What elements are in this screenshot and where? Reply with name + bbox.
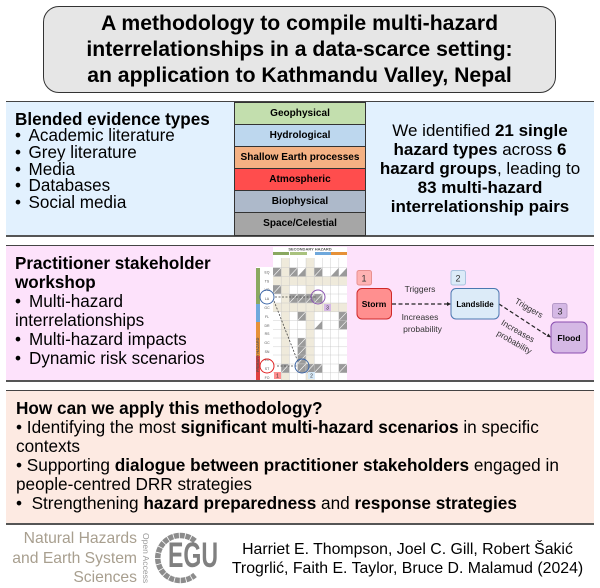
group: geophysical: Geophysical — [270, 108, 330, 119]
text: blended evidence types: Blended evidence types — [15, 110, 210, 128]
panel: workshop — [6, 245, 594, 382]
matrix: GC — [264, 341, 270, 345]
text: practitioner workshop: • Multi-hazard impacts — [15, 330, 187, 349]
title — [43, 6, 556, 93]
box 1 — [357, 270, 372, 285]
landslide — [451, 288, 499, 319]
group: atmospheric — [234, 168, 366, 191]
text: blended evidence types: • Social media — [15, 193, 126, 212]
matrix: VO — [264, 288, 270, 292]
text: blended evidence types: • Grey literature — [15, 143, 137, 162]
open access label: Open Access — [141, 533, 151, 583]
group: space — [234, 212, 366, 236]
authors: Trogrlić, Faith E. Taylor, Bruce D. Malamud (2024) — [232, 560, 583, 577]
text: blended evidence types: • Media — [15, 160, 75, 179]
label triggers 2: Triggers — [513, 296, 545, 320]
arrow: landslide to flood — [499, 304, 551, 338]
title: an application to Kathmandu Valley, Nepal — [87, 64, 512, 86]
journal name: and Earth System — [12, 550, 137, 566]
box 3 — [552, 304, 567, 318]
group: space: Space/Celestial — [263, 218, 337, 229]
flow diagram: storm landslide flood — [356, 270, 588, 356]
matrix: DR — [264, 324, 270, 328]
box 2 — [451, 270, 466, 285]
panel: blended evidence — [6, 101, 594, 237]
matrix: SECONDARY HAZARD — [288, 246, 332, 252]
box 2: 2 — [455, 274, 461, 284]
matrix: TS — [265, 280, 270, 284]
panel: application — [6, 390, 594, 525]
matrix — [256, 246, 347, 380]
text: summary: hazard types across 6 — [394, 140, 566, 158]
matrix: FL — [265, 315, 269, 319]
label triggers 1: Triggers — [405, 284, 435, 294]
matrix: 3 — [326, 306, 329, 312]
label increases probability 2: Increases — [500, 317, 536, 344]
text: practitioner workshop — [15, 254, 211, 368]
matrix: GC — [264, 306, 270, 310]
journal name: Natural Hazards — [24, 530, 137, 547]
text: blended evidence types — [15, 110, 210, 212]
matrix: ST — [265, 367, 270, 371]
matrix: EC — [265, 358, 270, 362]
text: blended evidence types: • Academic literature — [15, 126, 175, 145]
storm: Storm — [362, 299, 387, 309]
text: how can we apply — [16, 398, 559, 512]
text: summary — [380, 120, 580, 216]
group: biophysical: Biophysical — [272, 196, 328, 207]
text: summary: We identified 21 single — [392, 120, 568, 140]
text: how can we apply: • Identifying the most significant multi-hazard scenarios in specific — [16, 416, 539, 436]
group: shallow earth: Shallow Earth processes — [241, 152, 359, 163]
flood: Flood — [557, 333, 581, 343]
text: how can we apply: How can we apply this methodology? — [16, 398, 323, 418]
flood — [551, 322, 587, 353]
journal name — [12, 530, 137, 586]
label increases probability 1: probability — [403, 324, 443, 334]
text: practitioner workshop: • Multi-hazard — [15, 292, 123, 311]
arrow: storm to landslide — [392, 302, 451, 306]
label increases probability 2: probability — [495, 328, 534, 356]
journal name: Sciences — [73, 569, 137, 586]
matrix: EQ — [264, 270, 270, 274]
text: practitioner workshop: Practitioner stakeholder — [15, 254, 211, 272]
logo: EGU — [155, 532, 218, 584]
group: geophysical — [234, 102, 366, 125]
box 3: 3 — [557, 306, 563, 316]
text: how can we apply: people-centred DRR strategies — [16, 474, 252, 494]
storm — [357, 288, 392, 319]
matrix: FO — [265, 376, 270, 380]
matrix: 1 — [276, 374, 279, 380]
text: how can we apply: contexts — [16, 436, 80, 456]
group: hydrological: Hydrological — [270, 130, 330, 141]
matrix: LA — [265, 297, 270, 301]
text: practitioner workshop: workshop — [15, 273, 96, 292]
matrix: SN — [265, 350, 270, 354]
hazard groups stack — [234, 102, 366, 236]
text: practitioner workshop: interrelationships — [15, 311, 144, 330]
landslide: Landslide — [456, 300, 494, 309]
box 1: 1 — [361, 274, 367, 284]
text: blended evidence types: • Databases — [15, 176, 110, 195]
matrix: RS — [265, 332, 270, 336]
group: hydrological — [234, 124, 366, 147]
matrix: 2 — [310, 374, 313, 380]
text: practitioner workshop: • Dynamic risk scenarios — [15, 349, 205, 368]
text: summary: interrelationship pairs — [391, 196, 569, 216]
title: interrelationships in a data-scarce setting: — [86, 38, 513, 60]
text: how can we apply: • Strengthening hazard preparedness and response strategies — [16, 492, 517, 512]
group: biophysical — [234, 190, 366, 213]
text: summary: hazard groups, leading to — [380, 158, 580, 178]
group: shallow earth — [234, 146, 366, 169]
text: summary: 83 multi-hazard — [418, 178, 542, 196]
text: how can we apply: • Supporting dialogue between practitioner stakeholders engaged in — [16, 454, 559, 474]
matrix: PRIMARY HAZARD — [256, 337, 260, 372]
authors — [232, 540, 583, 577]
title: A methodology to compile multi-hazard — [101, 12, 498, 34]
authors: Harriet E. Thompson, Joel C. Gill, Robert Šakić — [242, 540, 573, 558]
logo: EGU: EGU — [168, 536, 218, 575]
group: atmospheric: Atmospheric — [269, 174, 331, 185]
label increases probability 1: Increases — [402, 312, 438, 322]
